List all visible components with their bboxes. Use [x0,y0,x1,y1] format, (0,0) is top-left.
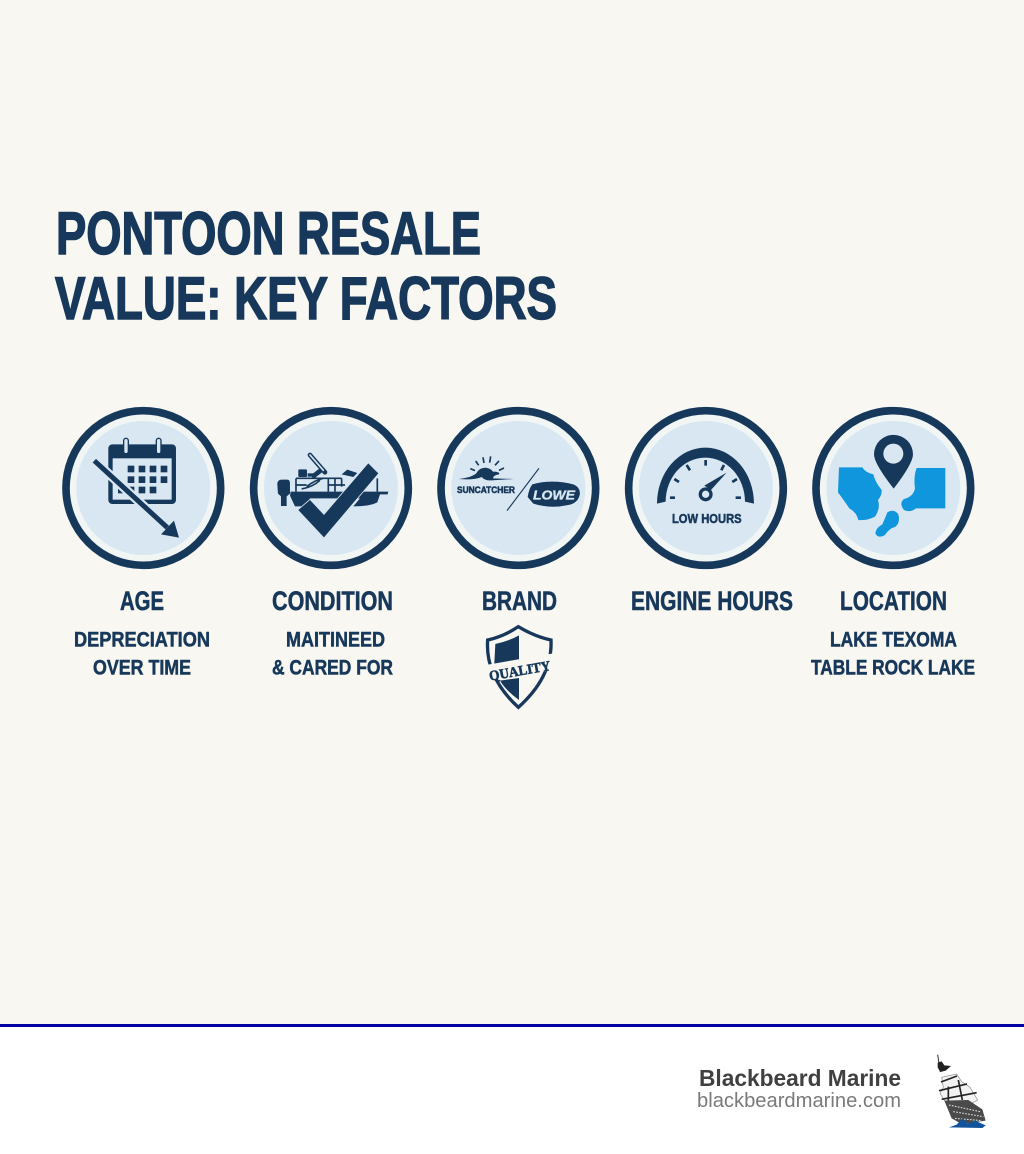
text: depreciation over time: DEPRECIATION [74,628,210,652]
text: maintained and cared for: & CARED FOR [272,656,393,680]
icon: brand logos [441,411,596,565]
title: VALUE: KEY FACTORS [55,265,557,332]
icon: gauge low hours: LOW HOURS [672,511,742,526]
label: engine hours: ENGINE HOURS [631,586,793,616]
panel: condition [254,411,408,680]
footer band [0,1024,1024,1154]
panel: location [811,411,975,680]
panel: engine hours [629,411,793,616]
icon: gauge low hours [629,411,783,565]
text: depreciation over time [74,628,210,680]
title [55,200,557,332]
panel: age [66,411,221,680]
icon: calendar with falling arrow [66,411,221,565]
logo: suncatcher: SUNCATCHER [457,485,515,495]
panel: brand [441,411,596,707]
text: lake names: LAKE TEXOMA [830,628,957,652]
text: lake names [811,628,975,680]
label: location: LOCATION [840,586,947,616]
logo: lowe [528,482,580,507]
title: PONTOON RESALE [56,200,481,267]
text: maintained and cared for [272,628,393,680]
logo: suncatcher [457,456,515,495]
footer brand text: Blackbeard Marine [699,1065,901,1091]
icon: map pin with lakes [816,411,971,565]
icon: quality shield [486,627,553,707]
footer brand text [697,1065,901,1112]
icon: pontoon boat with check mark [254,411,408,565]
label: condition: CONDITION [272,586,393,616]
footer brand text: blackbeardmarine.com [697,1090,901,1112]
label: age: AGE [120,586,164,616]
icon: ship logo [938,1055,986,1128]
text: depreciation over time: OVER TIME [93,656,191,680]
boat silhouette [277,455,388,506]
text: maintained and cared for: MAITINEED [286,628,385,652]
logo: lowe: LOWE [533,489,576,503]
text: lake names: TABLE ROCK LAKE [811,656,975,680]
icon: quality shield: QUALITY [488,659,552,685]
label: brand: BRAND [482,586,557,616]
